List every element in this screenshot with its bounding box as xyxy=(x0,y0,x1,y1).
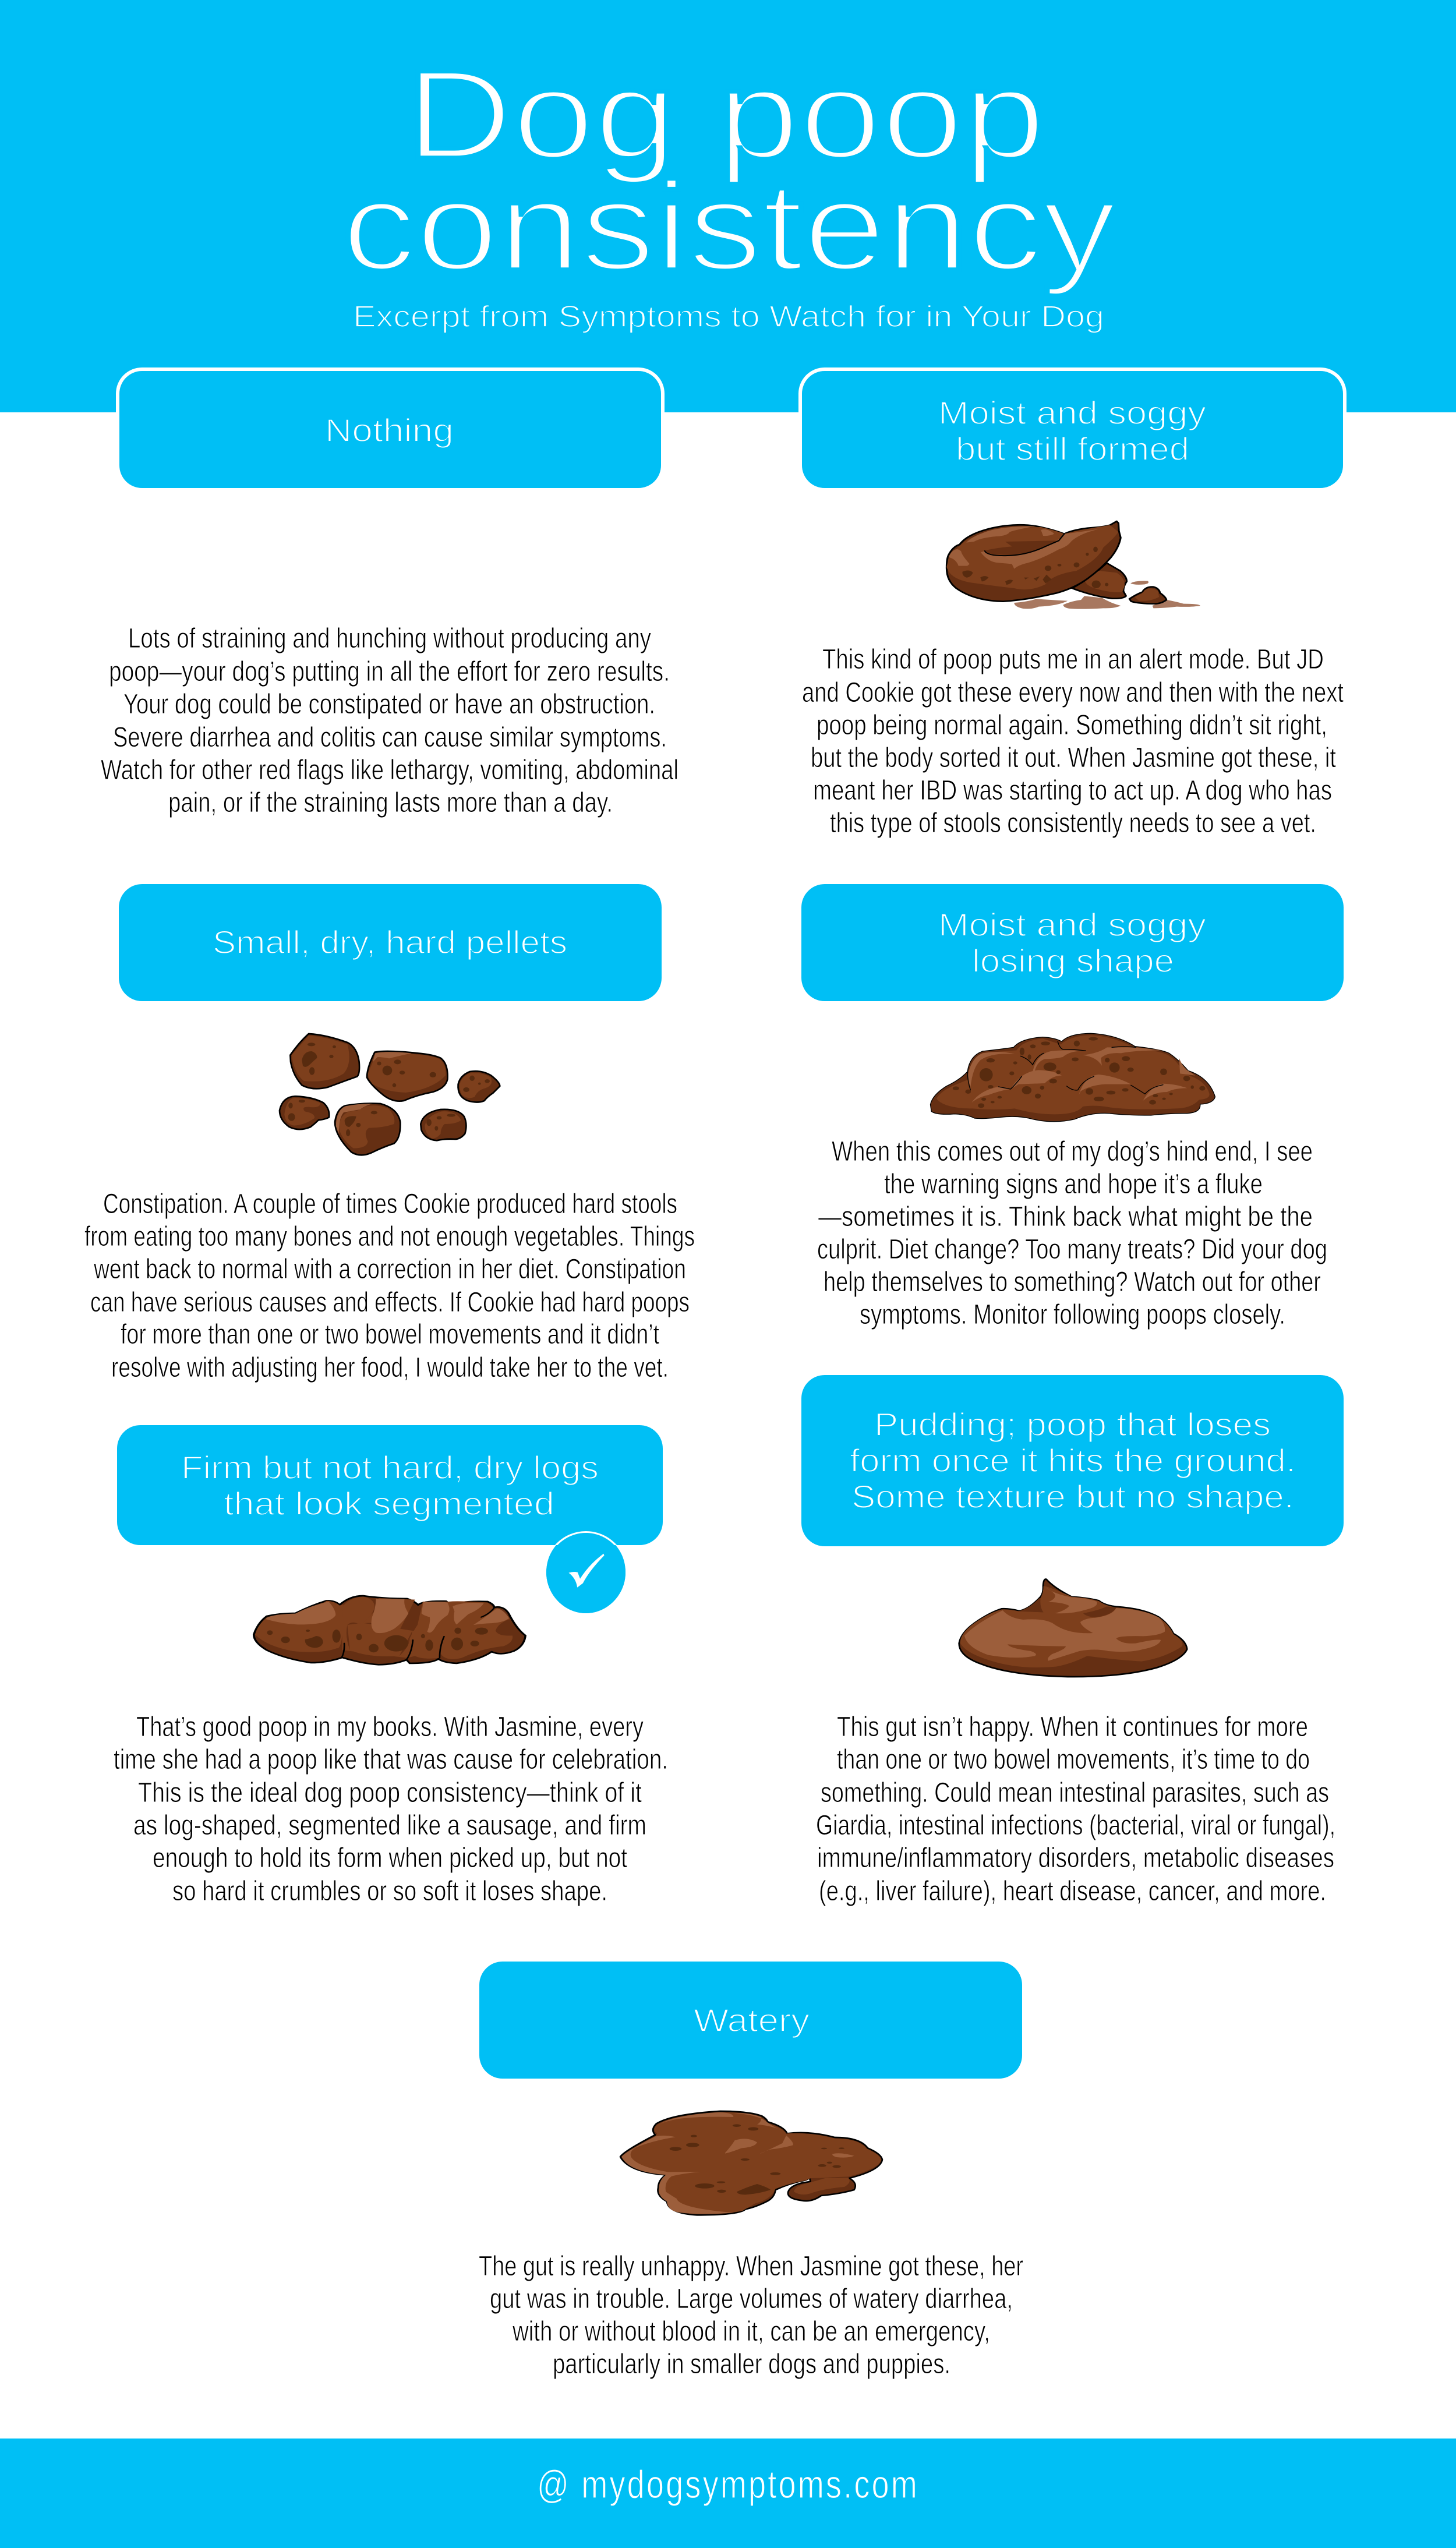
text: moist still formed: This kind of poop puts me in an alert mode. But JD xyxy=(822,644,1324,675)
icon: pudding poop xyxy=(959,1579,1187,1677)
footer url: @ mydogsymptoms.com xyxy=(537,2462,919,2507)
text: pudding: something. Could mean intestinal parasites, such as xyxy=(821,1777,1329,1808)
text: pellets: resolve with adjusting her food, I would take her to the vet. xyxy=(111,1352,669,1383)
title: consistency xyxy=(342,156,1116,296)
text: firm logs: time she had a poop like that was cause for celebration. xyxy=(114,1744,668,1775)
text: nothing: Your dog could be constipated or have an obstruction. xyxy=(123,689,655,720)
text: losing shape: the warning signs and hope it’s a fluke xyxy=(884,1169,1263,1200)
text: losing shape: —sometimes it is. Think back what might be the xyxy=(818,1201,1313,1232)
text: pellets: for more than one or two bowel movements and it didn’t xyxy=(121,1319,659,1350)
text: pellets: from eating too many bones and not enough vegetables. Things xyxy=(84,1221,695,1252)
text: pellets: Constipation. A couple of times Cookie produced hard stools xyxy=(103,1189,677,1220)
text: moist still formed: but the body sorted it out. When Jasmine got these, it xyxy=(811,743,1336,773)
text: pellets: went back to normal with a correction in her diet. Constipation xyxy=(93,1254,686,1285)
text: pudding: (e.g., liver failure), heart disease, cancer, and more. xyxy=(819,1876,1326,1907)
text: nothing: Watch for other red flags like lethargy, vomiting, abdominal xyxy=(101,755,678,786)
icon: losing-shape poop xyxy=(931,1033,1215,1122)
text: pudding xyxy=(816,1712,1335,1907)
icon: formed soggy poop xyxy=(946,521,1200,609)
icon: check badge xyxy=(545,1531,627,1614)
text: pudding: than one or two bowel movements, it’s time to do xyxy=(837,1744,1310,1775)
subtitle: Excerpt from Symptoms to Watch for in Your Dog xyxy=(353,300,1104,334)
panel: watery xyxy=(479,1962,1023,2380)
text: losing shape: help themselves to something? Watch out for other xyxy=(824,1267,1321,1298)
text: firm logs: This is the ideal dog poop consistency—think of it xyxy=(138,1777,642,1808)
panel: moist and soggy losing shape xyxy=(801,884,1344,1330)
text: moist still formed xyxy=(802,644,1344,839)
heading: moist still formed: Moist and soggy xyxy=(938,394,1206,431)
heading: losing shape: losing shape xyxy=(972,942,1174,979)
text: pellets xyxy=(84,1189,695,1383)
heading: pudding: Pudding; poop that loses xyxy=(874,1406,1271,1443)
text: moist still formed: meant her IBD was starting to act up. A dog who has xyxy=(813,775,1332,806)
heading: firm logs: Firm but not hard, dry logs xyxy=(181,1449,599,1486)
panel: firm but not hard xyxy=(114,1425,668,1907)
text: firm logs: as log-shaped, segmented like a sausage, and firm xyxy=(133,1810,646,1841)
heading: nothing xyxy=(118,369,663,490)
icon: pellets xyxy=(280,1034,500,1155)
heading: pellets xyxy=(119,884,662,1001)
text: losing shape: When this comes out of my dog’s hind end, I see xyxy=(832,1136,1313,1167)
text: moist still formed: this type of stools consistently needs to see a vet. xyxy=(830,808,1316,839)
text: watery: with or without blood in it, can be an emergency, xyxy=(512,2316,990,2347)
heading: watery xyxy=(479,1962,1022,2079)
heading: moist still formed xyxy=(800,369,1345,490)
text: moist still formed: poop being normal again. Something didn’t sit right, xyxy=(817,710,1327,741)
panel: nothing xyxy=(101,369,678,818)
text: watery: The gut is really unhappy. When Jasmine got these, her xyxy=(479,2251,1023,2282)
heading: losing shape: Moist and soggy xyxy=(938,906,1206,943)
heading: pudding: form once it hits the ground. xyxy=(850,1442,1296,1479)
title: Dog poop xyxy=(406,44,1045,185)
text: pellets: can have serious causes and effects. If Cookie had hard poops xyxy=(90,1287,690,1318)
heading: watery: Watery xyxy=(694,2002,810,2038)
text: losing shape: culprit. Diet change? Too many treats? Did your dog xyxy=(817,1234,1327,1265)
heading: moist still formed: but still formed xyxy=(956,430,1189,467)
heading: pudding xyxy=(801,1375,1344,1546)
heading: nothing: Nothing xyxy=(325,412,454,448)
heading: firm logs: that look segmented xyxy=(224,1485,554,1522)
text: firm logs xyxy=(114,1712,668,1907)
icon: firm segmented poop xyxy=(254,1596,525,1664)
text: watery: particularly in smaller dogs and puppies. xyxy=(553,2349,950,2380)
title xyxy=(342,44,1116,296)
text: pudding: immune/inflammatory disorders, metabolic diseases xyxy=(817,1843,1334,1874)
panel: small dry hard pellets xyxy=(84,884,695,1383)
text: nothing xyxy=(101,623,678,818)
text: nothing: poop—your dog’s putting in all the effort for zero results. xyxy=(109,656,670,687)
heading: pudding: Some texture but no shape. xyxy=(851,1478,1294,1515)
text: pudding: This gut isn’t happy. When it continues for more xyxy=(837,1712,1308,1743)
text: firm logs: so hard it crumbles or so soft it loses shape. xyxy=(172,1876,607,1907)
text: nothing: Severe diarrhea and colitis can cause similar symptoms. xyxy=(113,722,667,753)
footer band xyxy=(0,2439,1456,2548)
panel: moist and soggy but still formed xyxy=(800,369,1345,839)
icon: watery poop xyxy=(620,2111,882,2215)
heading: pellets: Small, dry, hard pellets xyxy=(213,924,567,960)
panel: pudding xyxy=(801,1375,1344,1907)
text: firm logs: enough to hold its form when picked up, but not xyxy=(153,1843,627,1874)
text: nothing: Lots of straining and hunching without producing any xyxy=(128,623,651,654)
header band xyxy=(0,0,1456,412)
text: losing shape xyxy=(817,1136,1327,1330)
heading: losing shape xyxy=(801,884,1344,1001)
heading: firm logs xyxy=(117,1425,663,1545)
text: watery: gut was in trouble. Large volumes of watery diarrhea, xyxy=(490,2284,1013,2314)
text: firm logs: That’s good poop in my books. With Jasmine, every xyxy=(136,1712,644,1743)
text: watery xyxy=(479,2251,1023,2380)
text: losing shape: symptoms. Monitor following poops closely. xyxy=(860,1299,1285,1330)
text: nothing: pain, or if the straining lasts more than a day. xyxy=(168,787,613,818)
